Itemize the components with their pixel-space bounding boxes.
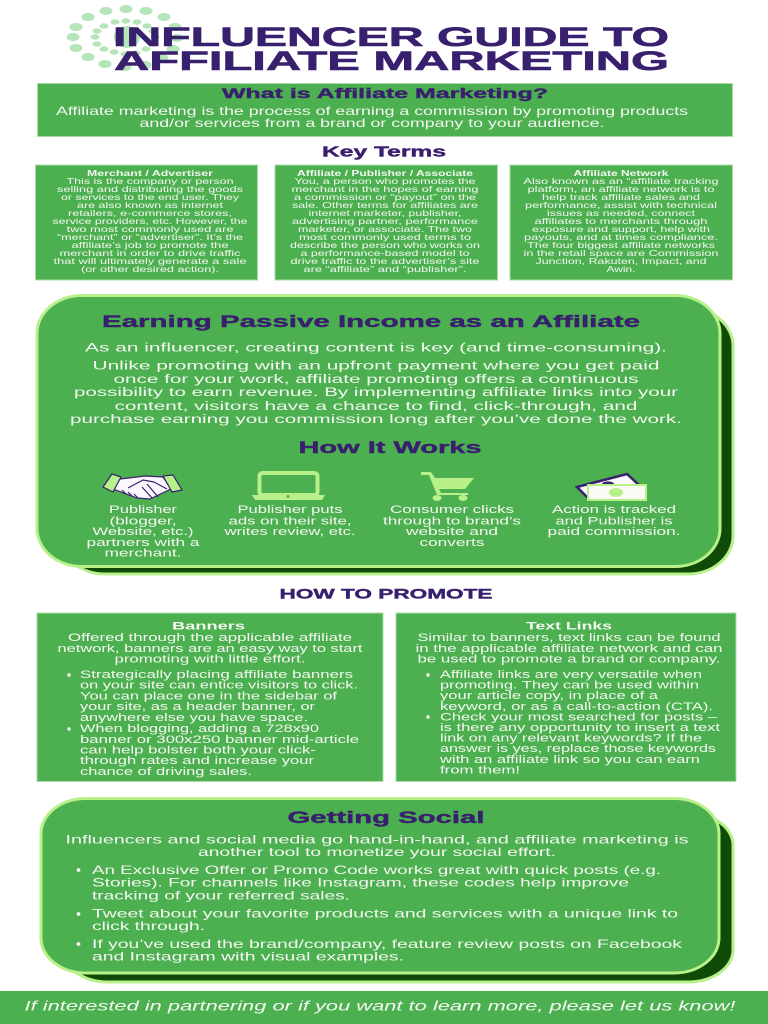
title — [113, 22, 669, 76]
heading: getting social: Getting Social — [288, 808, 484, 827]
panel: getting social — [41, 798, 733, 982]
panel: banners: When blogging, adding a 728x90 — [80, 723, 319, 735]
panel: affiliate / publisher / associate: advertising partner, performance — [292, 216, 478, 226]
panel: banners: banner or 300x250 banner mid-article — [80, 734, 359, 746]
panel: merchant / advertiser: “merchant” or “advertiser”. It’s the — [57, 232, 243, 242]
text: definition: Affiliate marketing is the process of earning a commission by promoting products — [56, 105, 688, 118]
text: step 3: website and — [404, 526, 498, 538]
panel: merchant / advertiser: or services to the end user. They — [61, 192, 240, 202]
text: step 1 — [86, 504, 200, 560]
panel: affiliate / publisher / associate: a performance-based model to — [300, 248, 470, 258]
panel: affiliate / publisher / associate: drive traffic to the advertiser’s site — [290, 256, 480, 266]
heading: how to promote: HOW TO PROMOTE — [280, 586, 492, 602]
text: social intro: Influencers and social media go hand-in-hand, and affiliate marketing is — [66, 834, 689, 846]
panel: banners: can help bolster both your click- — [80, 744, 317, 756]
panel: text links: your article copy, in place of a — [440, 690, 658, 702]
panel: affiliate network: issues as needed, connect — [547, 208, 696, 218]
icon: money — [577, 474, 646, 500]
list: social tips: Stories). For channels like Instagram, these codes help improve — [92, 876, 629, 890]
logo: concentric dots — [66, 5, 184, 71]
panel: text links: Similar to banners, text links can be found — [418, 632, 721, 644]
panel: merchant / advertiser: are also known as internet — [77, 200, 224, 210]
text: social intro: another tool to monetize your social effort. — [198, 846, 556, 859]
text: passive income explanation: content, visitors have a chance to find, click-through, and — [114, 399, 638, 413]
text: step 3: converts — [420, 537, 484, 549]
panel: text links: answer is yes, replace those keywords — [440, 743, 716, 755]
text: passive income explanation: Unlike promoting with an upfront payment where you get paid — [92, 358, 660, 372]
panel: affiliate network: in the retail space are Commission — [524, 248, 719, 258]
panel: banners: through rates and increase your — [80, 755, 315, 767]
text: step 4: paid commission. — [548, 526, 680, 538]
footer banner: If interested in partnering or if you want to learn more, please let us know! — [24, 998, 736, 1014]
panel: text links — [396, 613, 736, 782]
text: step 1: Website, etc.) — [92, 526, 194, 538]
panel: affiliate / publisher / associate: marketer, or associate. The two — [298, 224, 472, 234]
panel: merchant / advertiser: that will ultimately generate a sale — [54, 256, 247, 266]
panel: affiliate network: Affiliate Network — [574, 168, 669, 178]
panel: affiliate network: exposure and support, help with — [532, 224, 710, 234]
panel: affiliate network: Also known as an “affiliate tracking — [524, 176, 719, 186]
panel: banners: Banners — [172, 620, 245, 632]
panel: affiliate network: platform, an affiliate network is to — [528, 184, 715, 194]
panel: banners — [37, 613, 383, 782]
panel: text links: keyword, or as a call-to-action (CTA). — [440, 701, 713, 713]
text: step 3: Consumer clicks — [390, 504, 514, 516]
text: passive income explanation — [70, 358, 682, 426]
panel: banners: You can place one in the sidebar of — [80, 690, 337, 702]
panel: text links: link on any relevant keywords? If the — [440, 732, 702, 744]
text: intro: As an influencer, creating content is key (and time-consuming). — [85, 340, 667, 354]
panel: text links: Affiliate links are very versatile when — [440, 669, 702, 681]
panel: affiliate / publisher / associate: sale. Other terms for affiliates are — [292, 200, 478, 210]
panel: text links: in the applicable affiliate network and can — [416, 643, 723, 655]
list: social tips: If you’ve used the brand/company, feature review posts on Facebook — [92, 938, 682, 951]
text: step 1: (blogger, — [110, 516, 176, 528]
heading: key terms: Key Terms — [322, 144, 446, 160]
text: step 4: and Publisher is — [556, 516, 672, 528]
panel: merchant / advertiser: merchant in order to drive traffic — [60, 248, 242, 258]
panel: affiliate network: The four biggest affiliate networks — [527, 240, 715, 250]
panel: affiliate network: help track affiliate sales and — [542, 192, 700, 202]
panel: affiliate / publisher / associate: a commission or “payout” on the — [294, 192, 476, 202]
panel: banners: on your site can entice visitors to click. — [80, 680, 358, 692]
panel: banners: Offered through the applicable affiliate — [68, 632, 352, 644]
list: social tips: tracking of your referred sales. — [92, 890, 350, 902]
panel: affiliate network — [510, 165, 732, 280]
panel: affiliate network: Awin. — [606, 264, 636, 274]
text: passive income explanation: purchase earning you commission long after you’ve done the work. — [70, 412, 682, 426]
list: social tips — [77, 864, 682, 964]
text: step 4 — [548, 504, 680, 538]
footer banner — [0, 991, 768, 1024]
title: INFLUENCER GUIDE TO — [113, 22, 669, 52]
panel: text links: Check your most searched for posts – — [440, 712, 717, 724]
panel: affiliate / publisher / associate: internet marketer, publisher, — [308, 208, 462, 218]
text: step 1: partners with a — [86, 537, 200, 549]
panel: affiliate network: Junction, Rakuten, Impact, and — [536, 256, 707, 266]
panel: affiliate / publisher / associate: You, a person who promotes the — [294, 176, 476, 186]
text: step 2: writes review, etc. — [223, 526, 356, 538]
list: social tips: click through. — [92, 920, 205, 933]
title: AFFILIATE MARKETING — [114, 46, 669, 76]
panel: affiliate / publisher / associate — [275, 165, 498, 280]
panel: text links: is there any opportunity to insert a text — [440, 722, 720, 734]
panel: affiliate network: performance, assist with technical — [525, 200, 717, 210]
icon: handshake — [103, 474, 182, 499]
list: social tips: Tweet about your favorite products and services with a unique link to — [92, 908, 678, 920]
panel: affiliate network: affiliates to merchants through — [534, 216, 708, 226]
panel: banners: promoting with little effort. — [114, 654, 306, 666]
icon: shopping cart — [421, 472, 474, 501]
icon: laptop — [252, 473, 325, 500]
text: definition: and/or services from a brand or company to your audience. — [140, 117, 604, 130]
text: passive income explanation: possibility to earn revenue. By implementing affiliate links into your — [74, 385, 678, 399]
panel: merchant / advertiser — [36, 165, 258, 280]
heading: how it works: How It Works — [298, 438, 482, 457]
panel: affiliate / publisher / associate: Affiliate / Publisher / Associate — [297, 168, 473, 178]
panel: merchant / advertiser: retailers, e-commerce stores, — [68, 208, 232, 218]
text: step 1: merchant. — [104, 548, 182, 560]
panel: affiliate network: payouts, and at times compliance. — [524, 232, 718, 242]
panel: text links: Text Links — [526, 620, 612, 632]
panel: earning passive income — [37, 296, 733, 574]
panel: merchant / advertiser: This is the company or person — [66, 176, 234, 186]
panel: banners: Strategically placing affiliate banners — [80, 669, 353, 681]
panel: affiliate / publisher / associate: merchant in the hopes of earning — [292, 184, 479, 194]
panel: text links: promoting. They can be used within — [440, 680, 699, 692]
panel: merchant / advertiser: Merchant / Advertiser — [87, 168, 214, 178]
panel: banners: your site, as a header banner, or — [80, 701, 316, 713]
panel: text links: from them! — [440, 764, 520, 776]
text: passive income explanation: once for your work, affiliate promoting offers a continuous — [114, 372, 638, 386]
text: step 4: Action is tracked — [552, 504, 676, 516]
panel: merchant / advertiser: two most commonly used are — [66, 224, 234, 234]
panel: banners: network, banners are an easy way to start — [58, 643, 363, 655]
heading: what is affiliate marketing: What is Affiliate Marketing? — [222, 85, 548, 101]
text: step 2: Publisher puts — [238, 504, 342, 516]
panel: what is affiliate marketing — [38, 84, 732, 136]
panel: banners: anywhere else you have space. — [80, 712, 308, 724]
text: social intro — [66, 834, 689, 859]
panel: merchant / advertiser: (or other desired action). — [81, 264, 219, 274]
panel: merchant / advertiser: affiliate’s job to promote the — [72, 240, 229, 250]
panel: text links: with an affiliate link so you can earn — [438, 754, 700, 766]
list: social tips: and Instagram with visual examples. — [92, 950, 404, 964]
text: step 3: through to brand’s — [383, 516, 521, 528]
text: step 1: Publisher — [109, 504, 178, 516]
list: social tips: An Exclusive Offer or Promo Code works great with quick posts (e.g. — [92, 864, 661, 877]
panel: affiliate / publisher / associate: describe the person who works on — [290, 240, 480, 250]
panel: affiliate / publisher / associate: are “affiliate” and “publisher”. — [304, 264, 466, 274]
text: step 2 — [223, 504, 356, 538]
text: step 3 — [383, 504, 521, 549]
panel: merchant / advertiser: selling and distributing the goods — [57, 184, 243, 194]
panel: text links: be used to promote a brand or company. — [418, 654, 720, 666]
panel: banners: chance of driving sales. — [80, 766, 252, 778]
panel: merchant / advertiser: service providers, etc. However, the — [52, 216, 248, 226]
panel: affiliate / publisher / associate: most commonly used terms to — [299, 232, 471, 242]
text: definition — [56, 105, 688, 130]
heading: earning passive income: Earning Passive Income as an Affiliate — [102, 312, 640, 331]
text: step 2: ads on their site, — [228, 516, 352, 528]
